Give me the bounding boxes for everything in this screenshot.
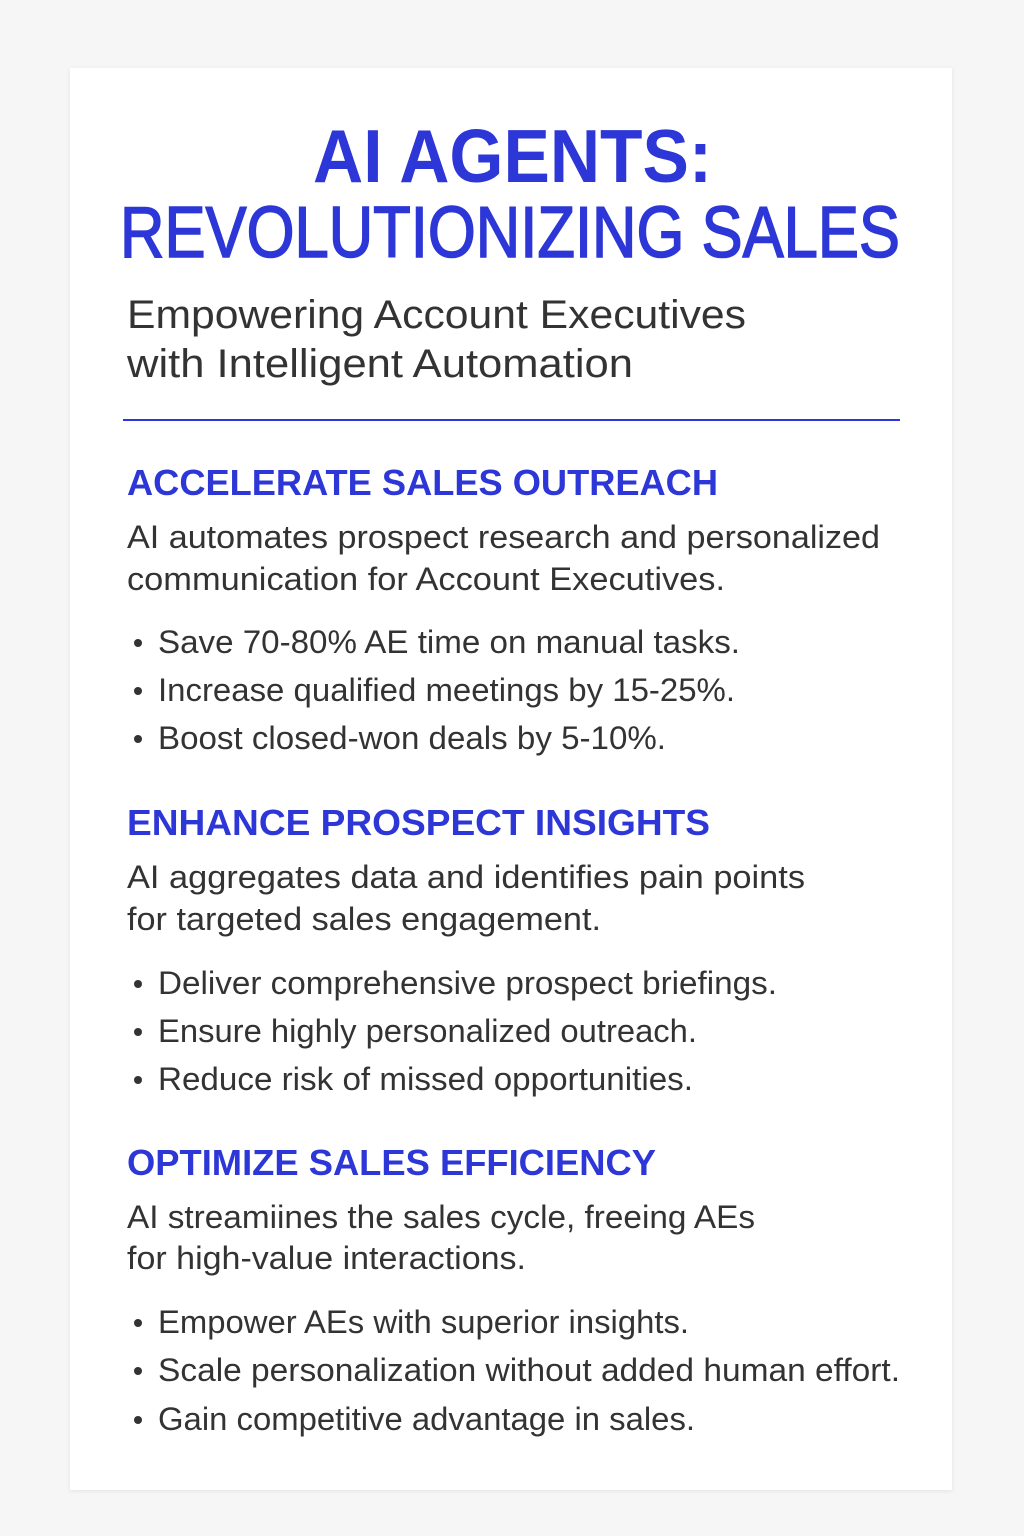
bullets: enhance: Ensure highly personalized outreach. (158, 1013, 697, 1049)
bullets: optimize: Empower AEs with superior insights. (158, 1304, 689, 1340)
heading: enhance: ENHANCE PROSPECT INSIGHTS (127, 802, 710, 843)
bullets: accelerate: Save 70-80% AE time on manual tasks. (158, 624, 740, 660)
bullets: optimize: Gain competitive advantage in sales. (158, 1401, 695, 1437)
body: enhance: AI aggregates data and identifies pain points (127, 859, 805, 895)
heading: accelerate: ACCELERATE SALES OUTREACH (127, 462, 718, 503)
bullets: enhance: Deliver comprehensive prospect briefings. (158, 965, 777, 1001)
card panel (70, 68, 952, 1490)
body: enhance: for targeted sales engagement. (127, 901, 601, 937)
bullets: enhance (134, 965, 777, 1097)
subtitle: Empowering Account Executives (127, 293, 746, 337)
bullets: accelerate: Increase qualified meetings by 15-25%. (158, 672, 735, 708)
subtitle: with Intelligent Automation (126, 342, 633, 386)
bullets: optimize: Scale personalization without added human effort. (158, 1352, 900, 1388)
section: accelerate sales outreach (127, 462, 880, 756)
body: optimize: for high-value interactions. (127, 1240, 526, 1276)
title: AI AGENTS: (313, 114, 712, 198)
body: optimize: AI streamiines the sales cycle, freeing AEs (127, 1199, 755, 1235)
bullets: enhance: Reduce risk of missed opportunities. (158, 1061, 693, 1097)
body: enhance (127, 859, 805, 937)
title: REVOLUTIONIZING SALES (120, 193, 900, 273)
section: enhance prospect insights (127, 802, 805, 1097)
body: optimize (127, 1199, 755, 1276)
heading: optimize: OPTIMIZE SALES EFFICIENCY (127, 1142, 656, 1183)
body: accelerate: AI automates prospect research and personalized (127, 519, 880, 555)
bullets: accelerate: Boost closed-won deals by 5-10%. (158, 720, 666, 756)
body: accelerate (127, 519, 880, 597)
subtitle (126, 293, 746, 386)
section: optimize sales efficiency (127, 1142, 900, 1437)
body: accelerate: communication for Account Executives. (127, 561, 725, 597)
title (120, 114, 900, 273)
bullets: accelerate (134, 624, 740, 756)
bullets: optimize (134, 1304, 900, 1437)
